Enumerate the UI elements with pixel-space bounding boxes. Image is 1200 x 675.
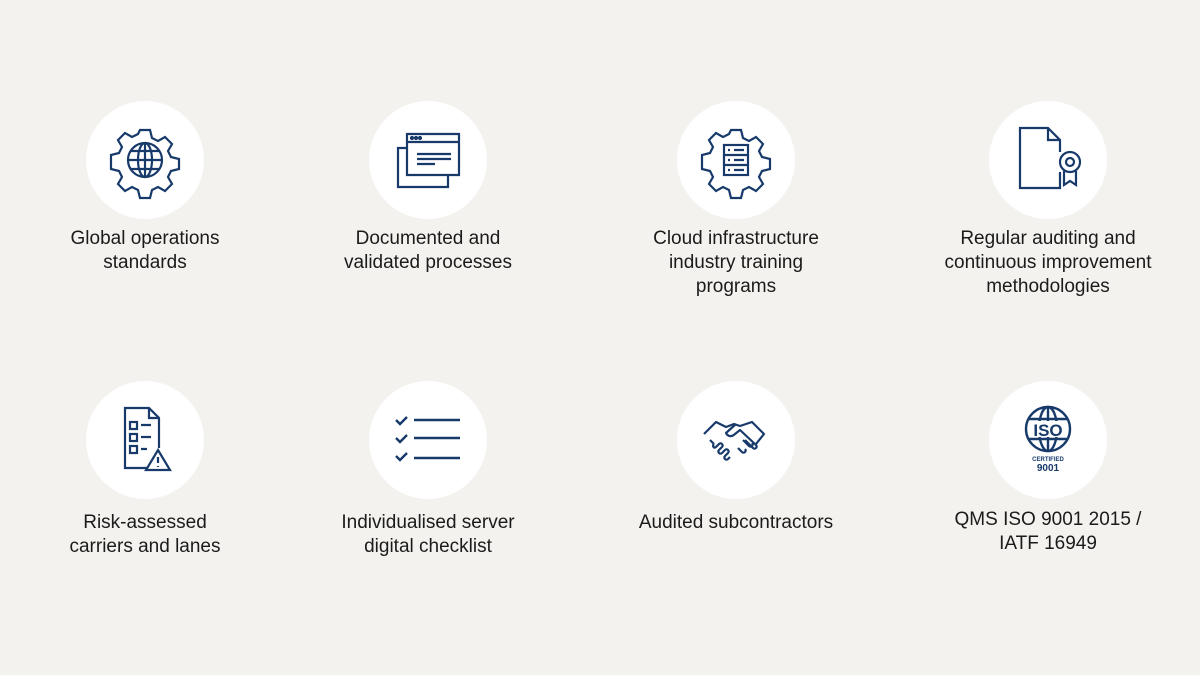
- item: cloud training: [653, 101, 819, 297]
- item: subcontractors: [639, 381, 833, 533]
- icon: ISO globe: ISO: [1033, 421, 1063, 440]
- label: methodologies: [986, 276, 1110, 297]
- label: [955, 509, 1142, 554]
- icon: windows: [369, 101, 487, 219]
- icon: ISO globe: CERTIFIED: [1032, 457, 1064, 463]
- label: [944, 228, 1152, 297]
- label: IATF 16949: [999, 533, 1097, 554]
- label: Regular auditing and: [960, 228, 1136, 249]
- icon: checklist warning: [86, 381, 204, 499]
- label: Documented and: [356, 228, 500, 249]
- label: QMS ISO 9001 2015 /: [955, 509, 1141, 530]
- label: continuous improvement: [944, 252, 1152, 273]
- item: risk-assessed: [69, 381, 221, 557]
- label: [344, 228, 512, 273]
- icon: handshake: [677, 381, 795, 499]
- label: carriers and lanes: [69, 536, 221, 557]
- item: ISO: [955, 381, 1142, 554]
- icon: list checks: [369, 381, 487, 499]
- label: validated processes: [344, 252, 512, 273]
- label: Global operations: [71, 228, 219, 249]
- label: digital checklist: [364, 536, 492, 557]
- label: [69, 512, 221, 557]
- item: auditing: [944, 101, 1152, 297]
- label: [341, 512, 515, 557]
- label: Risk-assessed: [83, 512, 207, 533]
- item: checklist: [341, 381, 515, 557]
- label: standards: [103, 252, 187, 273]
- icon: gear globe: [86, 101, 204, 219]
- label: [653, 228, 819, 297]
- item: global operations standards: [71, 101, 219, 273]
- label: programs: [696, 276, 776, 297]
- icon: ISO globe: 9001: [1037, 463, 1060, 474]
- label: Cloud infrastructure: [653, 228, 819, 249]
- label: industry training: [669, 252, 803, 273]
- label: Individualised server: [341, 512, 515, 533]
- icon: ISO globe: [989, 381, 1107, 499]
- icon: document certificate: [989, 101, 1107, 219]
- label: Audited subcontractors: [639, 512, 833, 533]
- label: [71, 228, 219, 273]
- item: documented processes: [344, 101, 512, 273]
- icon: gear server: [677, 101, 795, 219]
